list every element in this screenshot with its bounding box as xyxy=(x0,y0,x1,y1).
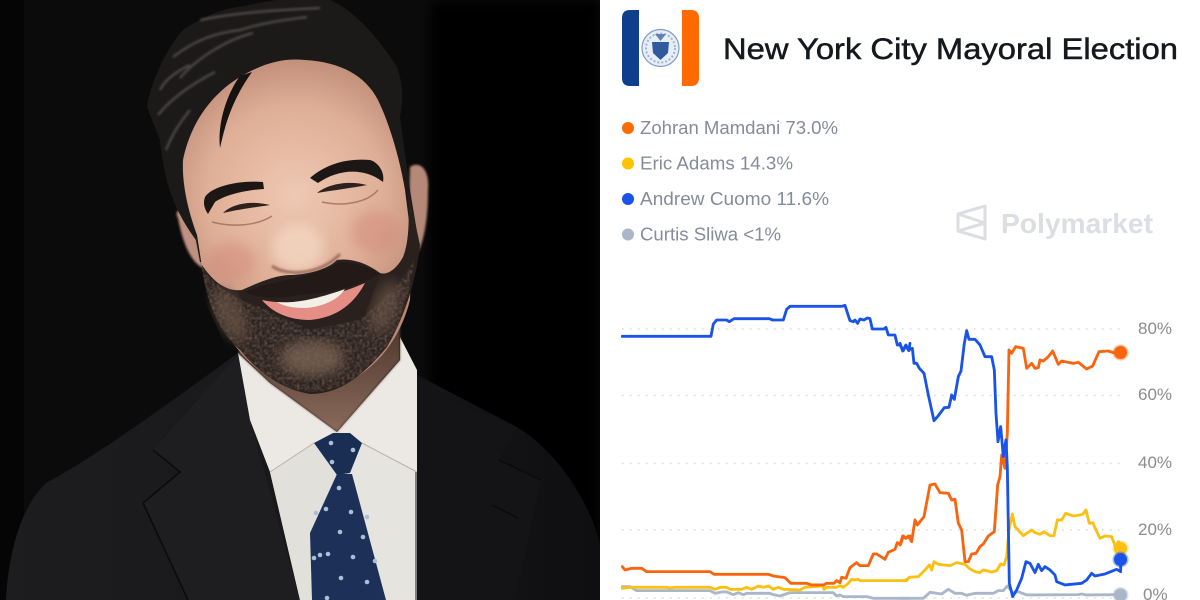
title: New York City Mayoral Election xyxy=(723,33,1178,66)
eyebrows xyxy=(204,160,383,214)
series: Andrew Cuomo xyxy=(622,305,1121,597)
nose xyxy=(272,224,340,272)
series: Eric Adams xyxy=(622,510,1121,590)
end marker: Curtis Sliwa xyxy=(1112,587,1128,600)
suit jacket xyxy=(6,353,600,600)
y axis labels xyxy=(1138,319,1172,600)
y axis labels: 60% xyxy=(1138,385,1172,404)
legend item: Curtis Sliwa: Curtis Sliwa <1% xyxy=(640,224,781,244)
legend item: Eric Adams: Eric Adams 14.3% xyxy=(640,154,793,174)
forelock xyxy=(220,72,252,148)
line chart xyxy=(622,305,1172,600)
y axis labels: 20% xyxy=(1138,520,1172,539)
suit lapels xyxy=(143,355,541,600)
end marker: Zohran Mamdani xyxy=(1112,344,1128,360)
ears xyxy=(177,165,428,268)
Polymarket watermark: Polymarket xyxy=(1001,208,1153,239)
beard and moustache xyxy=(202,190,420,394)
series: Zohran Mamdani xyxy=(622,347,1120,585)
y axis labels: 80% xyxy=(1138,319,1172,338)
cheek blush xyxy=(208,210,399,282)
end marker: Eric Adams xyxy=(1112,540,1128,556)
neck xyxy=(238,320,400,432)
series: Curtis Sliwa xyxy=(622,586,1120,598)
necktie with dots xyxy=(310,433,386,600)
legend item: Andrew Cuomo: Andrew Cuomo 11.6% xyxy=(640,189,829,209)
panel: market chart card background xyxy=(600,0,1200,600)
hair highlights xyxy=(158,8,320,150)
dark curtain background xyxy=(0,0,600,600)
eyes xyxy=(212,183,378,225)
legend item: Zohran Mamdani: Zohran Mamdani 73.0% xyxy=(640,118,838,138)
end marker: Andrew Cuomo xyxy=(1112,552,1128,568)
legend xyxy=(622,118,838,244)
white shirt and collar xyxy=(238,337,417,600)
panel: portrait photo xyxy=(0,0,600,600)
face xyxy=(183,60,412,392)
y axis labels: 40% xyxy=(1138,453,1172,472)
hair back xyxy=(147,0,420,262)
icon: NYC flag logo xyxy=(622,10,699,86)
smile xyxy=(262,283,365,320)
